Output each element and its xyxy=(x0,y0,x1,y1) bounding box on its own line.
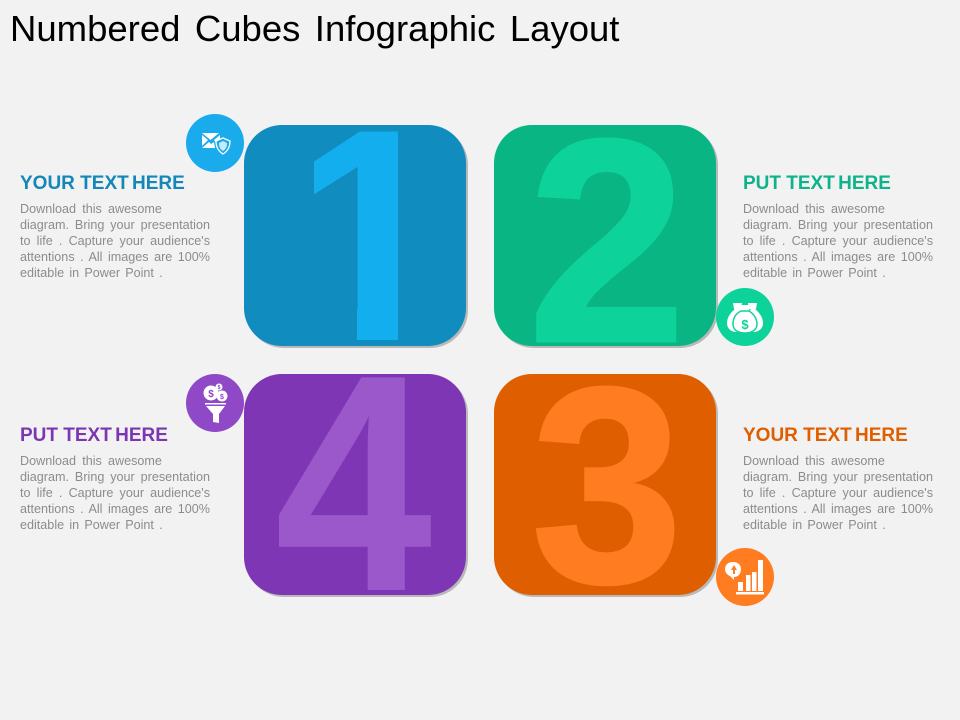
body text: top left: Download this awesome xyxy=(20,202,162,216)
icon: money bags: $ xyxy=(741,317,749,332)
icon: funnel with coins: $ xyxy=(208,389,214,400)
icon: funnel with coins: $ xyxy=(218,385,221,391)
text block: top left xyxy=(20,173,210,280)
cube 3 xyxy=(494,330,718,641)
body text: bottom right: editable in Power Point . xyxy=(743,518,886,532)
icon: money bags xyxy=(716,288,774,346)
body text: top left xyxy=(20,202,210,280)
icon: growth chart xyxy=(716,548,774,606)
cube 3: 3 xyxy=(531,330,683,641)
diagram: numbered cubes xyxy=(186,114,774,606)
body text: top left: attentions . All images are 100% xyxy=(20,250,210,264)
body text: bottom left xyxy=(20,454,210,532)
body text: bottom right: diagram. Bring your presentation xyxy=(743,470,933,484)
cube 1 xyxy=(244,125,468,348)
text block: top right xyxy=(743,173,933,280)
cube 4: 4 xyxy=(275,311,434,656)
body text: top right: editable in Power Point . xyxy=(743,266,886,280)
body text: bottom right xyxy=(743,454,933,532)
body text: top left: diagram. Bring your presentation xyxy=(20,218,210,232)
text block: bottom left xyxy=(20,425,210,532)
icon: funnel with coins: $ xyxy=(220,394,224,401)
body text: bottom left: editable in Power Point . xyxy=(20,518,163,532)
body text: top left: editable in Power Point . xyxy=(20,266,163,280)
heading: top right: PUT TEXT HERE xyxy=(743,173,891,194)
body text: bottom left: Download this awesome xyxy=(20,454,162,468)
body text: bottom left: diagram. Bring your presentation xyxy=(20,470,210,484)
text block: bottom right xyxy=(743,425,933,532)
body text: top right xyxy=(743,202,933,280)
body text: bottom right: Download this awesome xyxy=(743,454,885,468)
title: Numbered Cubes Infographic Layout xyxy=(10,8,619,49)
body text: bottom left: attentions . All images are 100% xyxy=(20,502,210,516)
icon: funnel with coins xyxy=(186,374,244,432)
heading: bottom left: PUT TEXT HERE xyxy=(20,425,168,446)
cube 1: 1 xyxy=(288,66,454,404)
body text: bottom right: attentions . All images are 100% xyxy=(743,502,933,516)
heading: bottom right: YOUR TEXT HERE xyxy=(743,425,908,446)
body text: top right: attentions . All images are 100% xyxy=(743,250,933,264)
body text: top right: Download this awesome xyxy=(743,202,885,216)
body text: top right: to life . Capture your audience's xyxy=(743,234,933,248)
body text: bottom left: to life . Capture your audience's xyxy=(20,486,210,500)
body text: top left: to life . Capture your audience's xyxy=(20,234,210,248)
icon: envelope with shield xyxy=(186,114,244,172)
body text: top right: diagram. Bring your presentation xyxy=(743,218,933,232)
body text: bottom right: to life . Capture your audience's xyxy=(743,486,933,500)
heading: top left: YOUR TEXT HERE xyxy=(20,173,185,194)
cube 2: 2 xyxy=(528,79,686,402)
